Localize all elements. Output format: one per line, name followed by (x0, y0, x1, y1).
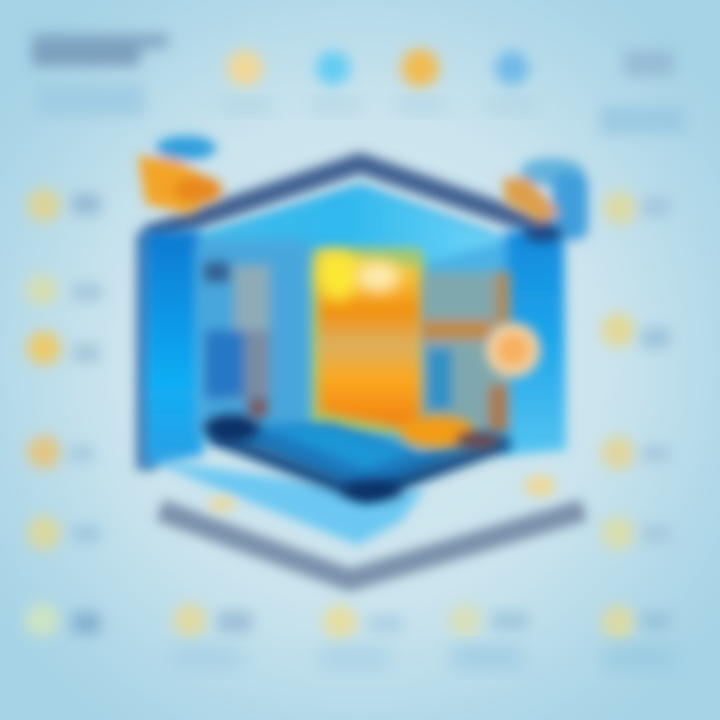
left corner ornament (138, 136, 222, 214)
badge center (497, 334, 529, 366)
main illustration group (136, 136, 588, 580)
top right text block (600, 50, 686, 134)
navy floor corner (204, 414, 260, 442)
right column icons (601, 191, 637, 639)
brown floor accent (247, 397, 269, 419)
brown right floor accent (456, 431, 500, 449)
right shelves (418, 272, 510, 433)
platform icon accents (207, 475, 556, 512)
navy floor point (342, 479, 402, 501)
floor highlight (262, 426, 412, 470)
left blue side panel (146, 230, 204, 466)
bottom row captions (172, 648, 675, 668)
floor surface (212, 424, 510, 498)
central orange block (319, 252, 420, 432)
right column labels (642, 198, 670, 630)
orange floor pile (400, 416, 476, 448)
left inner wall (197, 240, 309, 435)
lower platform outline (160, 510, 584, 580)
block halo (312, 248, 424, 434)
yellow top corner (318, 252, 358, 300)
top row icons (227, 49, 529, 87)
left column labels (68, 194, 102, 634)
roof band (146, 163, 556, 236)
left side panel edge (136, 232, 156, 470)
lower platform wedge (146, 458, 425, 545)
bottom row labels (218, 612, 528, 632)
left shelves (204, 262, 270, 400)
right blue side panel (500, 225, 566, 456)
round badge (486, 323, 540, 377)
dark floor edge (212, 436, 510, 496)
right corner ornament (503, 158, 588, 243)
left column icons (25, 188, 61, 637)
top row captions (222, 100, 538, 112)
block highlight (356, 262, 400, 292)
bottom row icons (173, 603, 482, 639)
back wall (190, 184, 510, 450)
heading block (32, 34, 168, 116)
ceiling surface (186, 188, 505, 265)
